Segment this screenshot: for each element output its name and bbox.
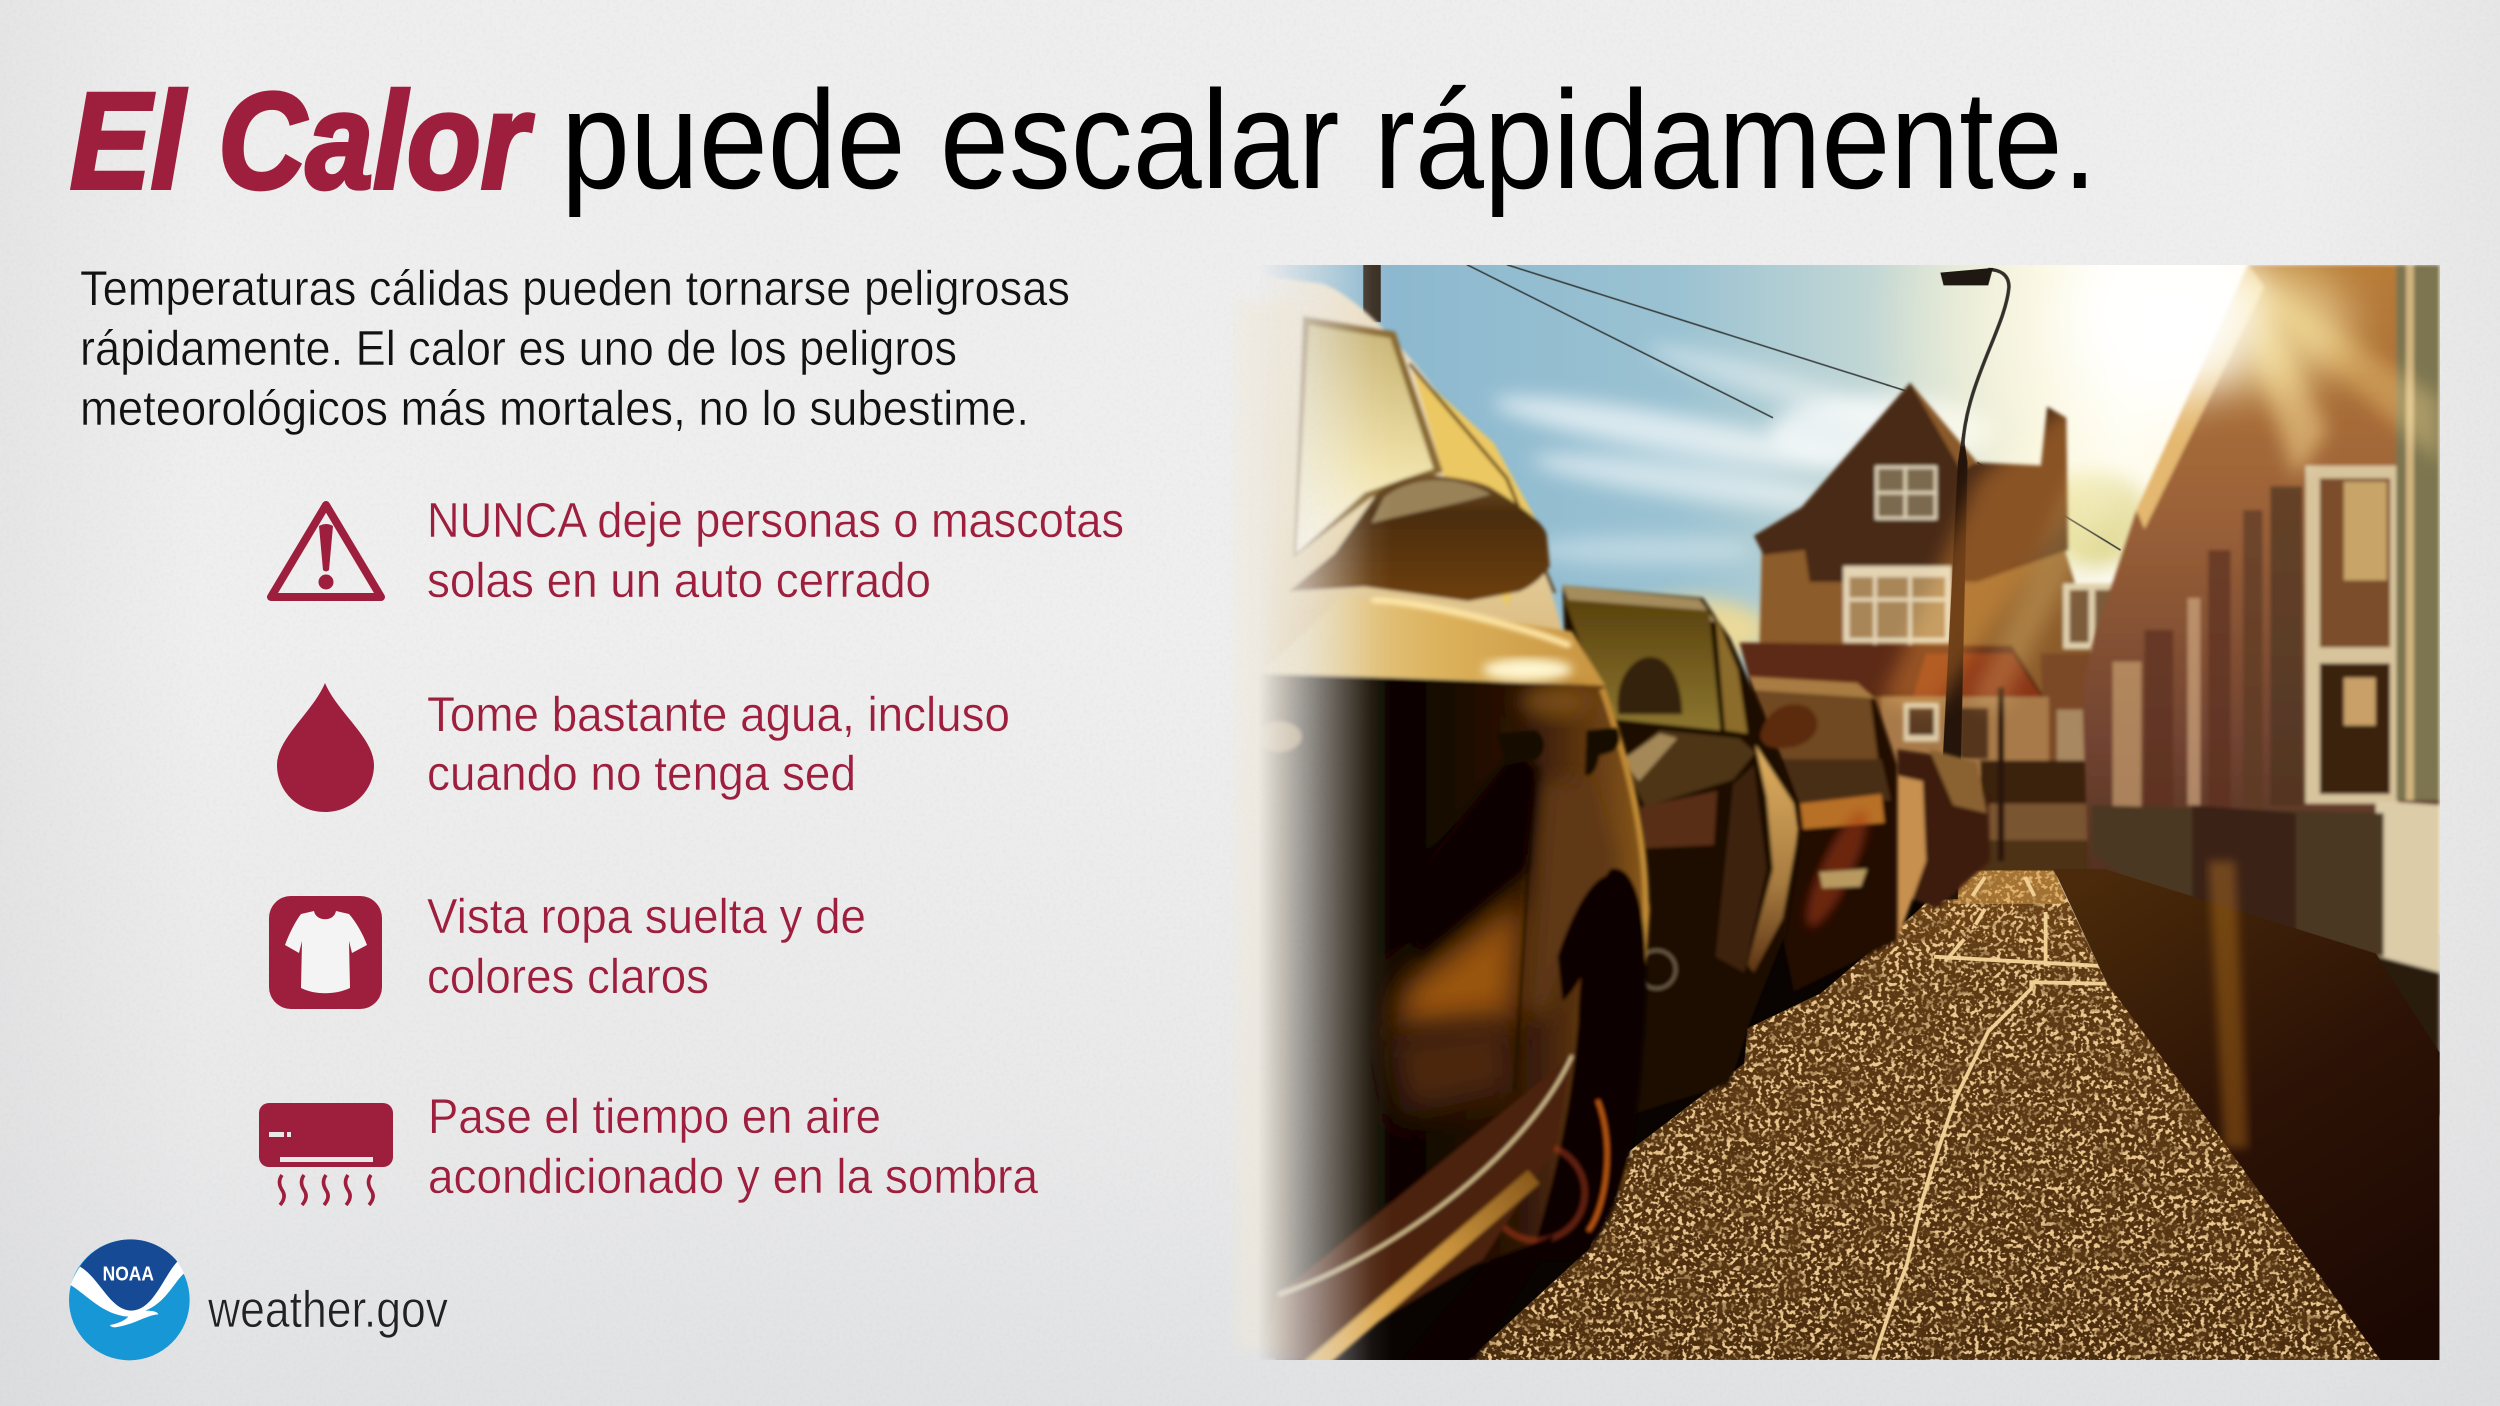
- sidewalk cracks: [1873, 877, 2106, 1360]
- second car mirror: [1760, 705, 1817, 748]
- door top panel: [1261, 595, 1606, 686]
- car windows: [1293, 316, 1555, 607]
- building window: [2305, 466, 2398, 804]
- second car: [1563, 585, 1817, 1116]
- website: weather.gov: weather.gov: [207, 1281, 448, 1339]
- foreground car: [1212, 271, 1650, 1371]
- far cars: [1881, 749, 1990, 941]
- title: El Calor: [70, 65, 534, 218]
- NOAA logo: [69, 1239, 190, 1360]
- tip text: colores claros: [427, 950, 709, 1004]
- sun glint on car: [1483, 658, 1572, 681]
- intro paragraph: meteorológicos más mortales, no lo subestime.: [80, 382, 1029, 436]
- title: [70, 61, 2097, 218]
- intro paragraph: rápidamente. El calor es uno de los peligros: [80, 322, 957, 376]
- tip: wear loose light clothing: [269, 890, 866, 1009]
- tip text: [427, 494, 1124, 608]
- intro paragraph: Temperaturas cálidas pueden tornarse peligrosas: [80, 262, 1070, 316]
- street lamp: [1936, 268, 2009, 899]
- title: puede escalar rápidamente.: [561, 61, 2097, 218]
- tip: never leave people or pets in a closed car: [271, 494, 1124, 608]
- tip text: NUNCA deje personas o mascotas: [427, 494, 1124, 548]
- tip text: Pase el tiempo en aire: [428, 1090, 881, 1144]
- tip: drink plenty of water: [277, 683, 1010, 812]
- lower door: [1212, 671, 1650, 1360]
- tip text: [428, 1090, 1039, 1204]
- car mirror: [1288, 474, 1550, 601]
- tip: spend time in air conditioning and shade: [259, 1090, 1039, 1205]
- tip text: acondicionado y en la sombra: [428, 1150, 1039, 1204]
- door sill highlight: [1307, 1177, 1534, 1371]
- tip text: [427, 890, 866, 1004]
- sunlit sidewalk: [1435, 861, 2423, 1371]
- lower roof: [1739, 643, 2044, 697]
- sky: [1215, 265, 2439, 934]
- sun rays and glow: [1881, 223, 2439, 1148]
- tip text: cuando no tenga sed: [427, 747, 856, 801]
- tip text: Vista ropa suelta y de: [427, 890, 866, 944]
- intro paragraph: [80, 262, 1070, 436]
- third car: [1749, 676, 1897, 992]
- brick house in background: [1739, 383, 2124, 877]
- door sheen: [1392, 898, 1523, 1032]
- house windows: [1843, 466, 2124, 649]
- power lines and utility pole: [1363, 265, 2121, 550]
- icon: water drop: [277, 683, 374, 812]
- black reflection on door: [1403, 749, 1539, 957]
- tip text: solas en un auto cerrado: [427, 554, 931, 608]
- icon: shirt: [269, 896, 382, 1009]
- tip text: [427, 688, 1010, 801]
- shadow under the cars: [1276, 797, 1955, 1360]
- wheel arch: [1531, 868, 1646, 1260]
- NOAA logo: NOAA: [103, 1262, 154, 1285]
- icon: warning triangle: [271, 505, 381, 597]
- building on the right: [2082, 265, 2439, 1116]
- icon: air conditioner: [259, 1103, 393, 1205]
- door handles: [1496, 727, 1620, 775]
- tip text: Tome bastante agua, incluso: [427, 688, 1010, 742]
- shaded pavement: [2054, 869, 2439, 1360]
- photo: sunlit street with parked cars: [1212, 223, 2439, 1371]
- faded cream edge of photo: [1235, 300, 1295, 1350]
- lower body speckled panel: [1260, 1055, 1572, 1360]
